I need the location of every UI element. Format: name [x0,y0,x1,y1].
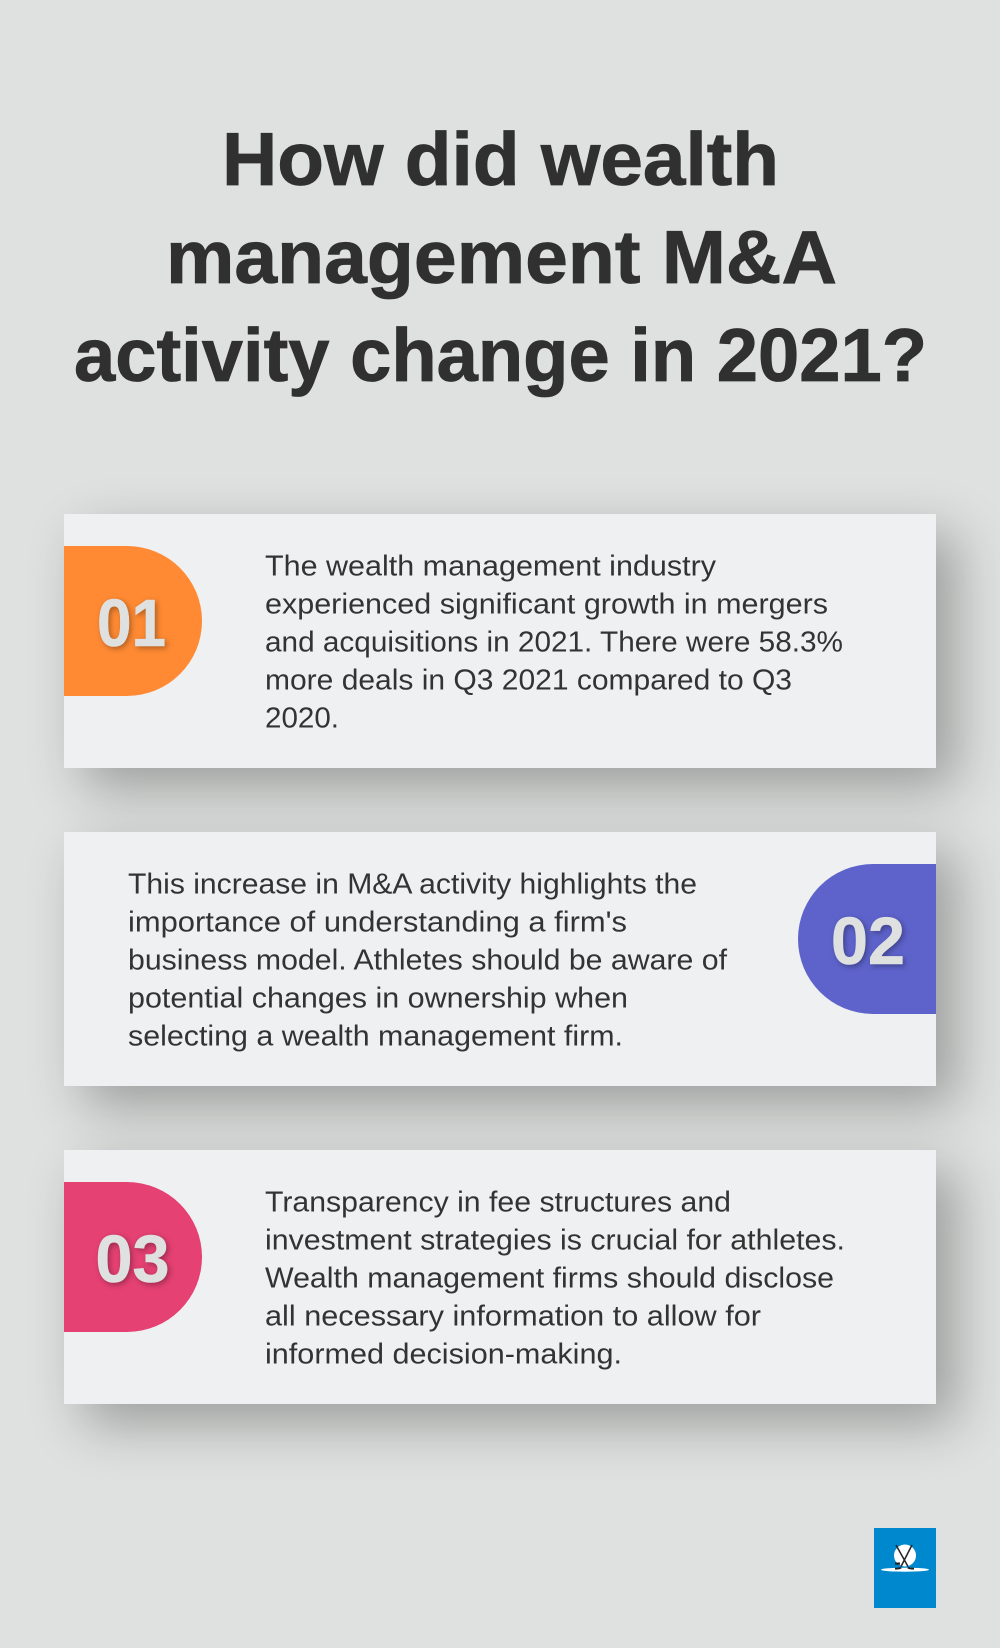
step 03 number and text: 03 [96,1222,170,1297]
step 03 number and text: Wealth management firms should disclose [265,1262,834,1294]
badge: 01 [64,546,202,696]
step 03 number and text: all necessary information to allow for [265,1300,761,1332]
step 02 number and text: selecting a wealth management firm. [128,1020,623,1052]
step 01 number and text: and acquisitions in 2021. There were 58.3% [265,626,843,658]
step 01 number and text: more deals in Q3 2021 compared to Q3 [265,664,792,696]
step 01 number and text: The wealth management industry [265,550,717,582]
panel: step 02 [64,832,936,1086]
step 01 number and text: 01 [97,586,166,661]
badge: 02 [798,864,936,1014]
step 01 number and text: 2020. [265,702,339,734]
panel: step 01 [64,514,936,768]
title [74,117,927,398]
step 02 number and text: importance of understanding a firm's [128,906,627,938]
step 02 number and text: business model. Athletes should be aware of [128,944,728,976]
title: activity change in 2021? [74,313,927,397]
step 03 number and text [96,1186,845,1370]
step 01 number and text [97,550,843,734]
title: How did wealth [222,117,779,201]
title: management M&A [166,215,837,299]
step 02 number and text [128,868,908,1052]
step 03 number and text: investment strategies is crucial for athletes. [265,1224,845,1256]
step 02 number and text: potential changes in ownership when [128,982,628,1014]
step 03 number and text: Transparency in fee structures and [265,1186,731,1218]
badge: 03 [64,1182,202,1332]
step 01 number and text: experienced significant growth in mergers [265,588,828,620]
panel: step 03 [64,1150,936,1404]
step 02 number and text: This increase in M&A activity highlights the [128,868,697,900]
step 02 number and text: 02 [831,904,905,979]
icon: hockey sticks logo [874,1528,936,1608]
step 03 number and text: informed decision-making. [265,1338,622,1370]
